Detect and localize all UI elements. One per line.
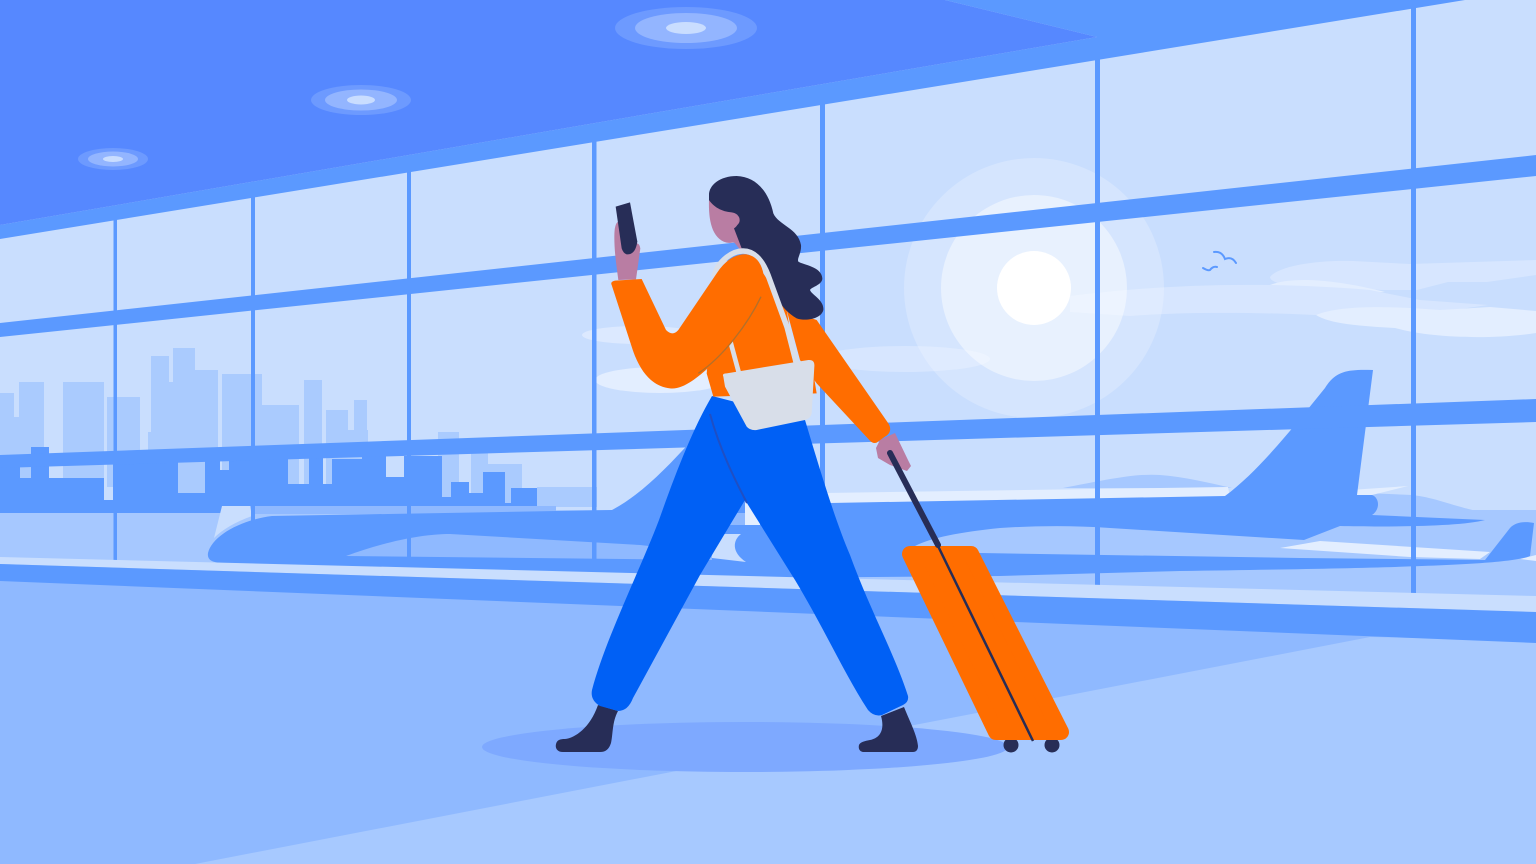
hair — [709, 176, 823, 320]
glimpses of sky between the legs — [712, 500, 760, 562]
right hills — [1063, 475, 1536, 560]
strap front drop — [730, 340, 739, 373]
airplane: right, main body with tail fin — [733, 370, 1534, 578]
raised hand — [614, 222, 640, 280]
ceiling light: small — [78, 148, 148, 170]
runway glint near nose of left airplane — [214, 506, 252, 538]
suitcase centre seam — [938, 546, 1033, 741]
ceiling light: large — [615, 7, 757, 49]
torso — [707, 273, 817, 397]
window sill dark band — [0, 564, 1536, 643]
trousers — [592, 396, 908, 715]
face and neck — [709, 199, 750, 253]
right shoe — [859, 707, 918, 752]
lower hand — [876, 433, 911, 471]
ceiling beam — [0, 0, 1465, 239]
window sill light band — [0, 557, 1536, 612]
city skyline: translucent towers — [0, 348, 597, 507]
shoulder bag — [723, 360, 814, 430]
clouds — [582, 260, 1536, 393]
left airplane window band — [346, 534, 712, 560]
ceiling light: medium — [311, 85, 411, 115]
airplane: left, with tail behind traveller — [208, 440, 760, 580]
suitcase telescopic handle — [890, 453, 938, 545]
ear — [727, 214, 740, 226]
ground outside — [0, 510, 1536, 610]
horizontal beam: upper — [0, 155, 1536, 337]
sleeve crease — [698, 297, 761, 373]
suitcase body — [910, 554, 1061, 732]
phone — [616, 202, 637, 254]
front arm and shoulder — [611, 254, 763, 388]
vertical window mullions — [114, 0, 1416, 594]
ceiling — [0, 0, 1097, 225]
runway highlights — [825, 486, 1536, 561]
floor base — [0, 575, 1536, 864]
sky background — [0, 0, 1536, 620]
traveller figure — [556, 176, 938, 752]
suitcase — [910, 546, 1061, 752]
suitcase wheels — [1004, 738, 1060, 752]
icon: birds — [1203, 252, 1236, 270]
horizontal beam: lower — [0, 399, 1536, 468]
city skyline: solid silhouette — [0, 447, 537, 513]
floor shadow — [482, 722, 1008, 772]
shoulder strap — [714, 251, 797, 366]
back arm — [787, 310, 890, 443]
tarmac strip below city — [222, 506, 556, 514]
trouser fold — [710, 414, 747, 503]
left shoe — [556, 705, 618, 752]
sun — [904, 158, 1164, 418]
floor light patch — [195, 637, 1536, 864]
